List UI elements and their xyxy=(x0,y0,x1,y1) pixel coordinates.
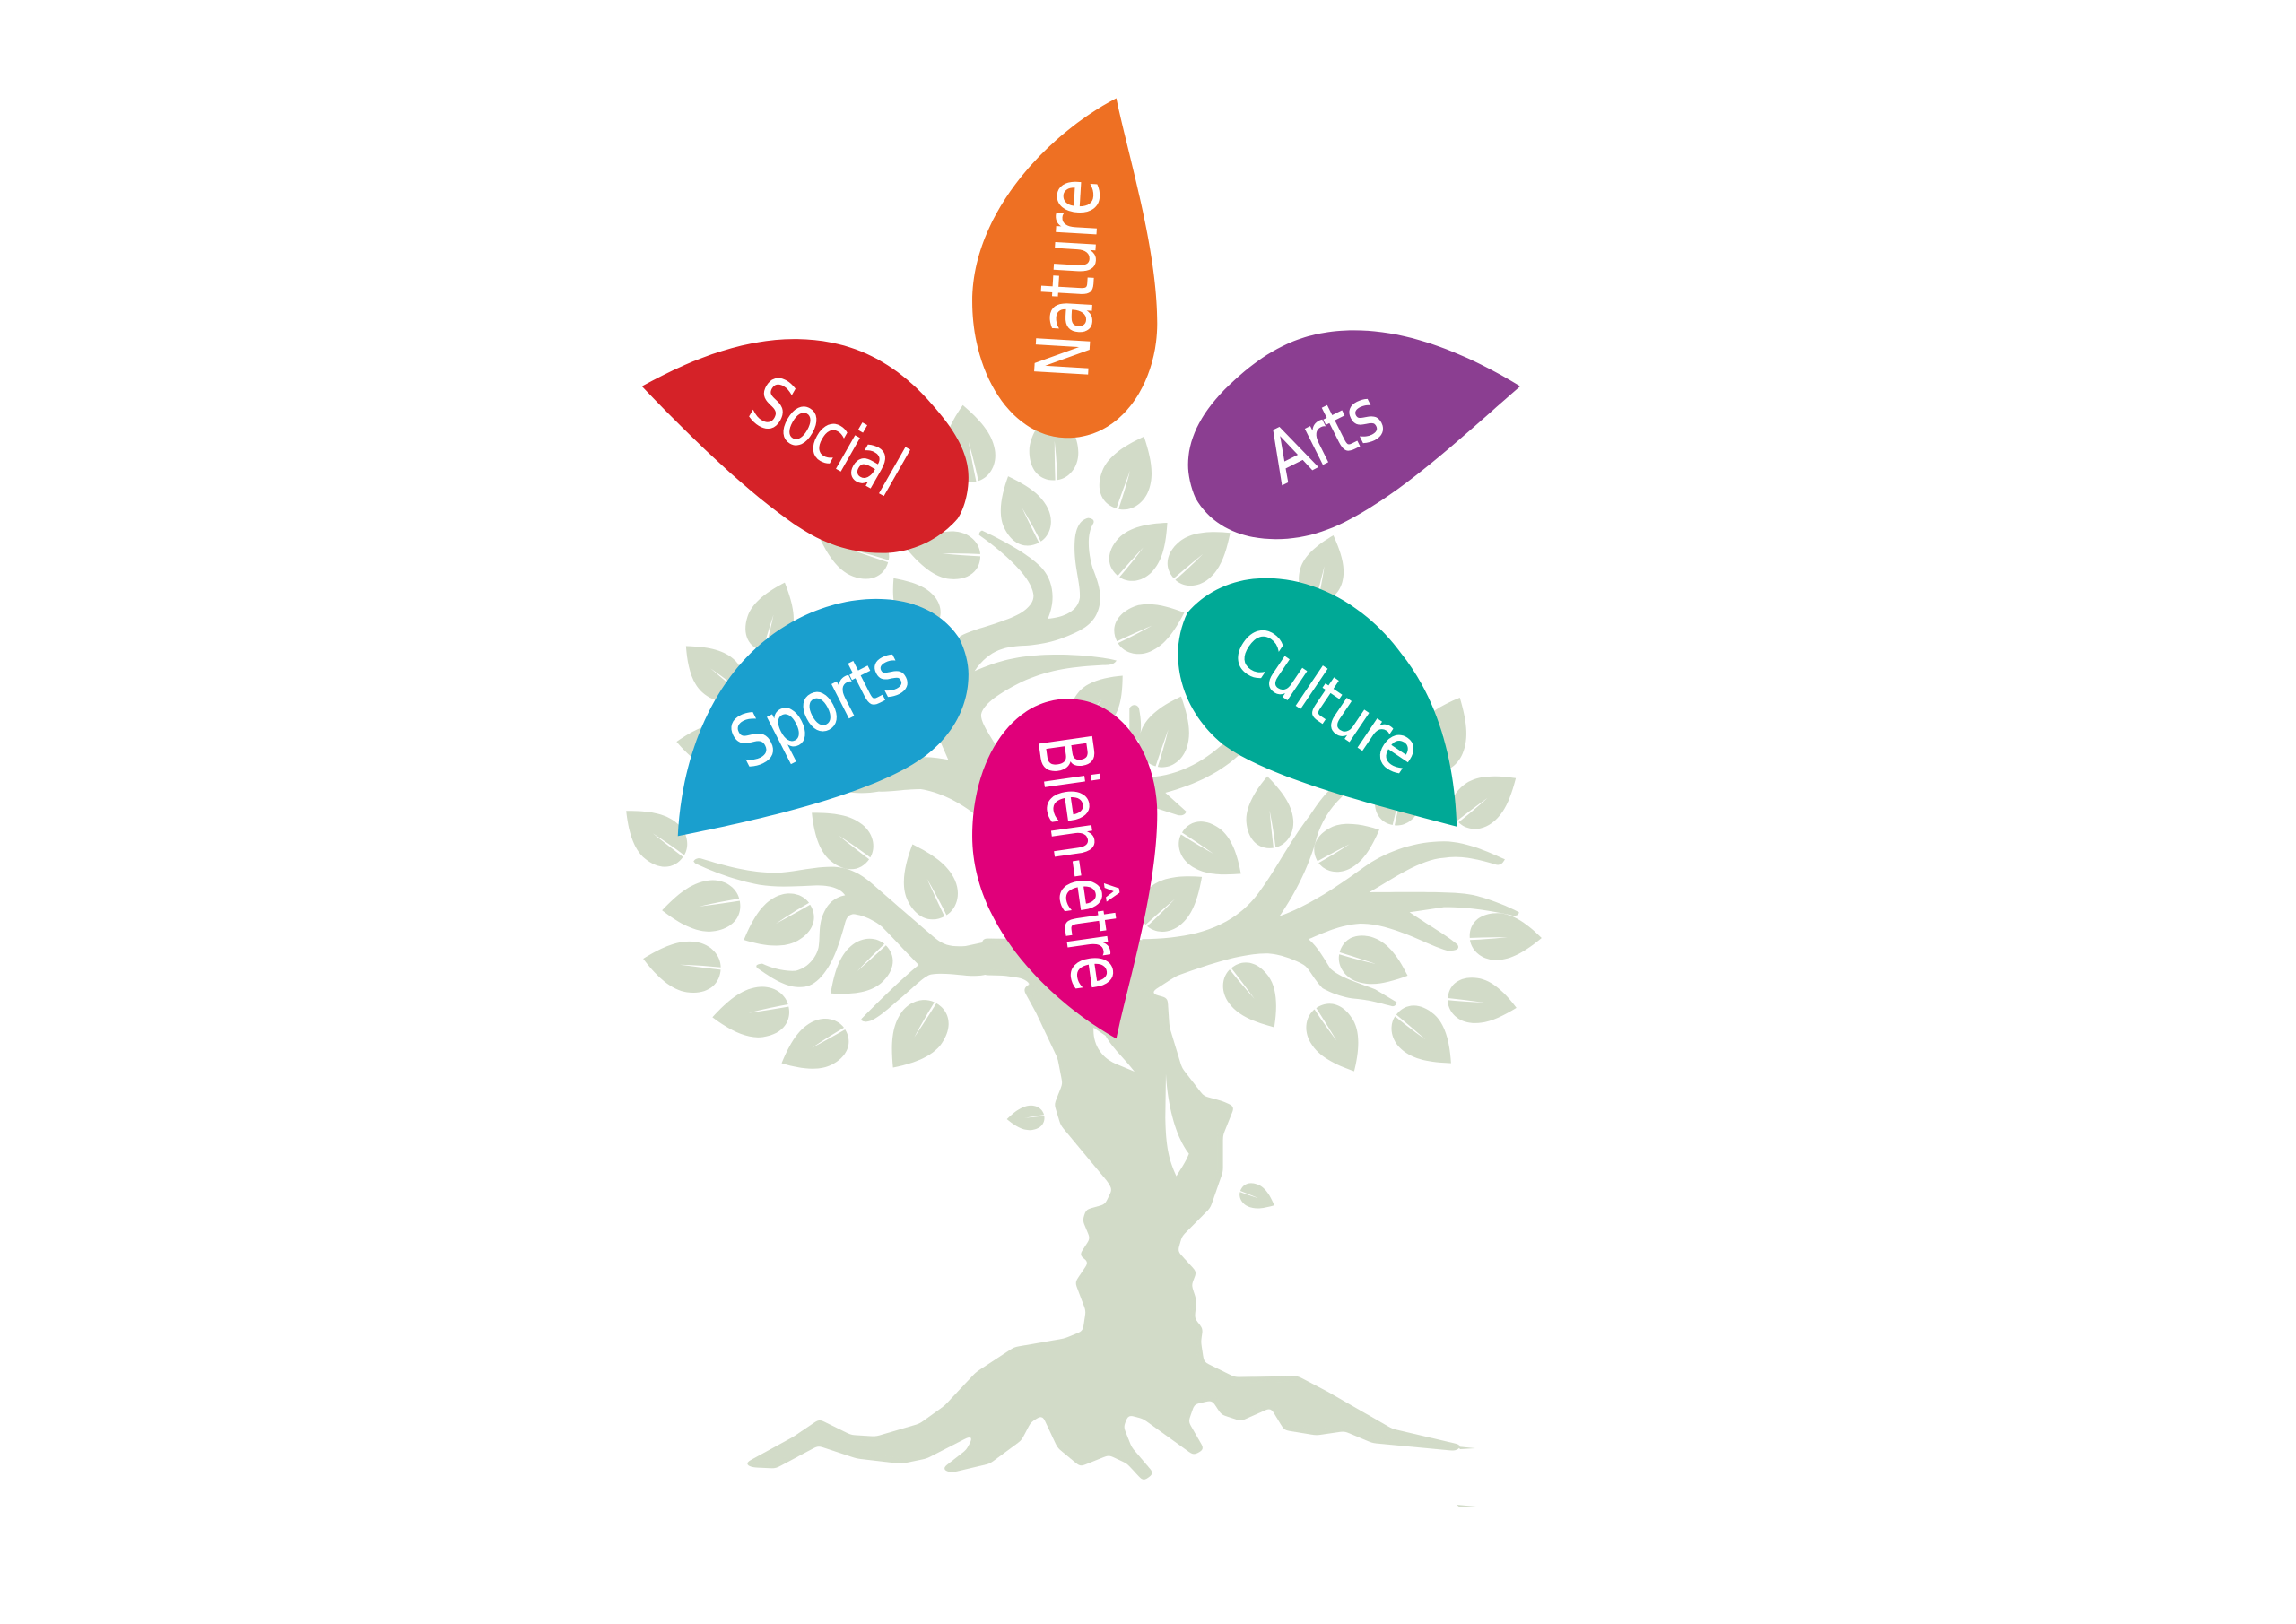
petal: Arts xyxy=(1188,330,1520,539)
petal: Culture xyxy=(1178,578,1457,827)
label: Bien-être: Bien-être xyxy=(1021,729,1141,995)
leaf cluster: crown middle xyxy=(670,566,1529,852)
root trailing marks xyxy=(1457,1446,1476,1507)
leaf cluster: crown top xyxy=(811,401,1353,663)
right branches xyxy=(1142,738,1519,1006)
small leaf beside trunk, left xyxy=(1006,1104,1047,1132)
label: Arts: Arts xyxy=(1252,372,1396,501)
petal: Social xyxy=(642,339,969,553)
label: Social: Social xyxy=(736,361,920,513)
small leaf beside trunk, right xyxy=(1235,1178,1279,1216)
trunk openings xyxy=(1093,1028,1189,1177)
trunk and roots xyxy=(745,939,1463,1480)
petal: Bien-être xyxy=(972,699,1157,1038)
tree illustration xyxy=(610,401,1542,1507)
left branches xyxy=(693,858,987,1021)
leaf cluster: lower left xyxy=(610,794,968,1085)
label: Nature: Nature xyxy=(1021,177,1118,381)
leaf cluster: lower right xyxy=(1127,808,1542,1083)
coloured petals xyxy=(642,98,1520,1038)
label: Culture: Culture xyxy=(1220,612,1434,789)
petal: Nature xyxy=(972,98,1157,438)
label: Sports: Sports xyxy=(718,629,921,786)
petal: Sports xyxy=(678,599,969,836)
upper branches xyxy=(846,518,1141,819)
